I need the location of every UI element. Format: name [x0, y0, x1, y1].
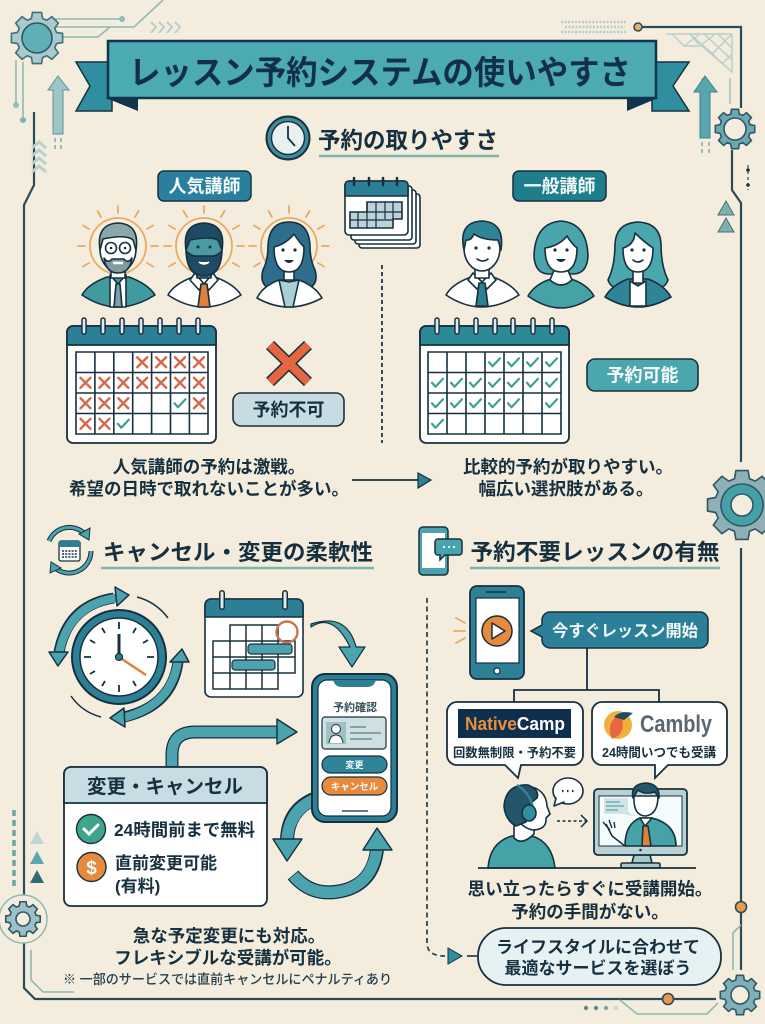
- icon: gear bottom left: [0, 895, 47, 943]
- text: general summary: 幅広い選択肢がある。: [478, 479, 654, 499]
- phone: booking confirmation: [312, 674, 397, 822]
- text: start immediately: [468, 879, 712, 922]
- panel: change & cancel box: 直前変更可能: [115, 853, 217, 873]
- badge: 一般講師: 一般講師: [524, 176, 596, 196]
- person: woman short hair: [528, 221, 594, 308]
- connector: dashed to pill: [427, 598, 477, 964]
- icon: big X: [270, 345, 308, 382]
- heading: キャンセル・変更の柔軟性: キャンセル・変更の柔軟性: [103, 540, 373, 565]
- icon: triangles left: [30, 831, 44, 883]
- badge: 予約不可: 予約不可: [252, 400, 324, 420]
- icon: gear right: [708, 471, 765, 539]
- panel: change & cancel box: [64, 767, 267, 906]
- text: general summary: 比較的予約が取りやすい。: [463, 457, 673, 477]
- text: popular summary: [69, 457, 349, 499]
- arrow: circular pair: [273, 799, 392, 892]
- icon: up arrow right: [694, 76, 717, 156]
- person: bearded man: [164, 206, 244, 307]
- icon: phone with chat: [419, 527, 462, 575]
- person: young man: [446, 221, 519, 307]
- calendar: general teachers: [420, 320, 569, 443]
- badge: 予約可能: 予約可能: [606, 366, 678, 386]
- badge: 一般講師: [513, 171, 606, 201]
- text: start immediately: 予約の手間がない。: [511, 902, 669, 922]
- person: woman with dark hair: [249, 206, 329, 307]
- title banner: [76, 41, 689, 111]
- illustration: student with headset: [488, 778, 587, 868]
- icon: gear bottom right: [720, 975, 760, 1015]
- callout: lifestyle pill: [478, 928, 721, 985]
- icon: clock heading: [266, 116, 310, 160]
- person: senior man: [78, 206, 158, 307]
- phone: booking confirmation: キャンセル: [331, 782, 379, 793]
- icon: phone with play: [454, 586, 524, 679]
- callout: lifestyle pill: 最適なサービスを選ぼう: [504, 958, 692, 978]
- person: woman long hair: [605, 222, 671, 307]
- text: general summary: [463, 457, 673, 499]
- bubble: 今すぐレッスン開始: 今すぐレッスン開始: [552, 622, 698, 640]
- panel: change & cancel box: 24時間前まで無料: [114, 820, 255, 840]
- panel: change & cancel box: 変更・キャンセル: [87, 776, 243, 798]
- callout: lifestyle pill: ライフスタイルに合わせて: [496, 938, 700, 957]
- icon: triangles right: [718, 201, 734, 232]
- heading: 予約不要レッスンの有無: 予約不要レッスンの有無: [470, 540, 720, 565]
- arrow: comparison: [352, 473, 431, 488]
- icon: speech bubble: [553, 778, 583, 806]
- icon: dollar: $: [86, 858, 97, 879]
- icon: clock with arrows: [49, 587, 189, 727]
- icon: stacked calendars: [345, 178, 420, 248]
- panel: change & cancel box: (有料): [115, 877, 160, 896]
- text: popular summary: 希望の日時で取れないことが多い。: [69, 479, 349, 499]
- badge: 人気講師: [158, 171, 251, 201]
- heading: 予約の取りやすさ: 予約の取りやすさ: [318, 127, 498, 153]
- icon: gear top right: [715, 109, 755, 149]
- illustration: monitor with teacher: [594, 783, 687, 868]
- card: NativeCamp: 回数無制限・予約不要: [453, 745, 576, 760]
- card: Cambly: [592, 702, 727, 778]
- logo: NativeCamp: NativeCamp: [465, 714, 565, 734]
- divider: dashed: [381, 265, 383, 443]
- text: popular summary: 人気講師の予約は激戦。: [113, 457, 305, 477]
- arrow: dotted: [557, 815, 587, 827]
- badge: 人気講師: 人気講師: [168, 176, 240, 196]
- icon: up arrow left: [48, 76, 69, 152]
- icon: gear top left: [11, 12, 63, 64]
- card: NativeCamp: [447, 702, 583, 778]
- title text: レッスン予約システムの使いやすさ: [129, 54, 631, 91]
- arrow: box to phone: [172, 719, 297, 770]
- calendar: popular teachers: [67, 320, 216, 443]
- phone: booking confirmation: 予約確認: [333, 700, 377, 714]
- icon: Cambly bird: [604, 711, 633, 739]
- text: flexibility summary: フレキシブルな受講が可能。: [114, 948, 342, 968]
- icon: dollar: [77, 852, 106, 882]
- badge: 予約不可: [233, 393, 344, 426]
- card: Cambly: Cambly: [640, 711, 713, 738]
- badge: 予約可能: [587, 359, 698, 391]
- icon: green check: [76, 814, 106, 844]
- connector: tree: [514, 648, 659, 702]
- card: Cambly: 24時間いつでも受講: [602, 745, 716, 760]
- text: flexibility summary: [114, 926, 342, 968]
- text: start immediately: 思い立ったらすぐに受講開始。: [468, 879, 712, 899]
- icon: sync calendar: [49, 527, 91, 573]
- desk line: [478, 867, 696, 869]
- text: note: ※ 一部のサービスでは直前キャンセルにペナルティあり: [63, 971, 392, 987]
- text: flexibility summary: 急な予定変更にも対応。: [133, 926, 325, 946]
- phone: booking confirmation: 変更: [345, 759, 364, 770]
- arrow: calendar to phone: [311, 621, 365, 667]
- icon: schedule calendar: [205, 593, 303, 697]
- bubble: 今すぐレッスン開始: [531, 612, 708, 648]
